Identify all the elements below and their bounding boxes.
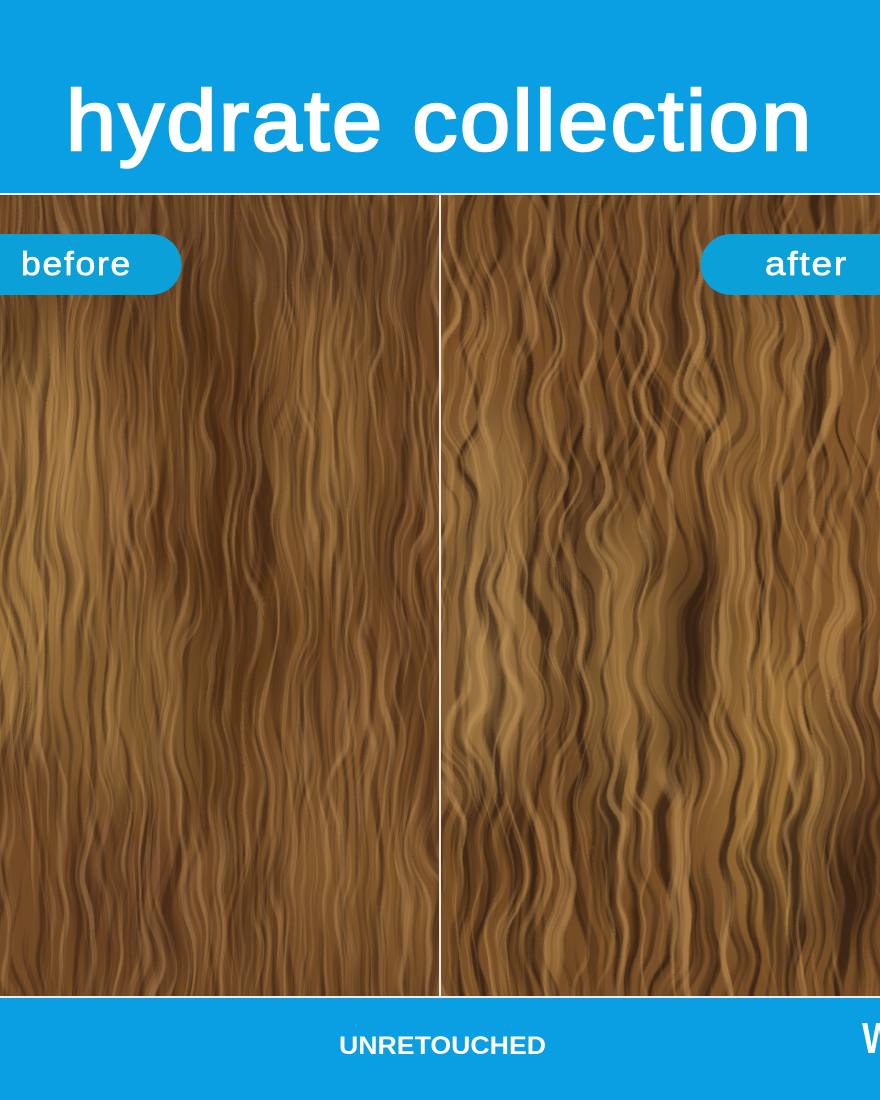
unretouched caption: UNRETOUCHED [339,1032,546,1060]
after label pill [700,234,880,295]
before label pill: before [21,245,132,282]
top banner [0,0,880,194]
after label pill: after [765,245,848,282]
title: hydrate collection [66,74,814,169]
bottom divider line [0,996,880,998]
bottom banner [0,997,880,1100]
centre divider between photos [439,195,441,996]
top divider line [0,193,880,195]
photo: after hair [441,195,880,996]
photo: before hair [0,195,439,996]
before label pill [0,234,182,295]
